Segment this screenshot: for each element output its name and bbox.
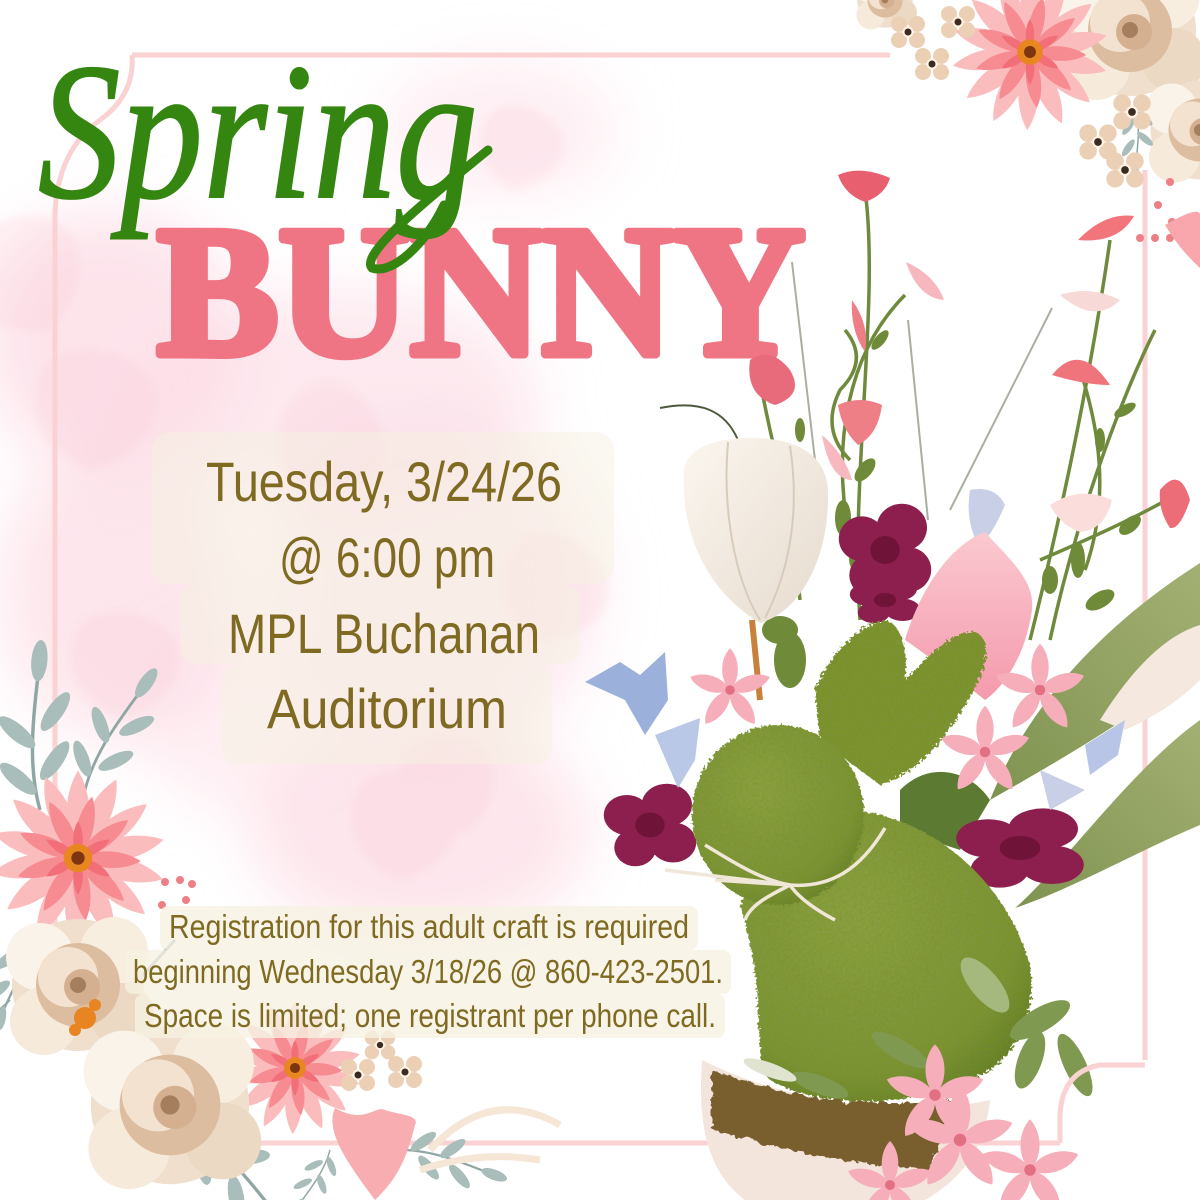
plum, pink and blue blossoms <box>585 644 1125 888</box>
event details text block: Auditorium <box>267 677 507 740</box>
green moss bunny <box>692 621 1032 1101</box>
watercolor pink floral wash <box>0 60 622 940</box>
registration note <box>125 906 731 1038</box>
title: Spring: Spring <box>38 24 478 240</box>
event details text block: @ 6:00 pm <box>279 526 495 589</box>
registration note: Space is limited; one registrant per phone call. <box>144 997 716 1034</box>
large green leaves <box>900 563 1200 908</box>
raffia bow <box>665 828 885 920</box>
registration note: Registration for this adult craft is required <box>169 908 689 945</box>
registration note: beginning Wednesday 3/18/26 @ 860-423-2501. <box>133 953 723 990</box>
frame corner curve <box>1060 1065 1145 1143</box>
event details text block: Tuesday, 3/24/26 <box>206 450 562 513</box>
corner flowers: top right <box>855 0 1200 268</box>
title: BUNNY: BUNNY <box>157 189 805 395</box>
moss basket and lower florals <box>701 950 1099 1200</box>
event details text block <box>152 432 614 764</box>
event details text block: MPL Buchanan <box>228 602 540 665</box>
pink tulip <box>905 532 1032 700</box>
bouquet stems and small flowers <box>660 171 1190 688</box>
plum blossoms behind tulip <box>839 504 931 623</box>
white tulip <box>684 438 828 700</box>
corner flowers: bottom left <box>0 634 560 1200</box>
